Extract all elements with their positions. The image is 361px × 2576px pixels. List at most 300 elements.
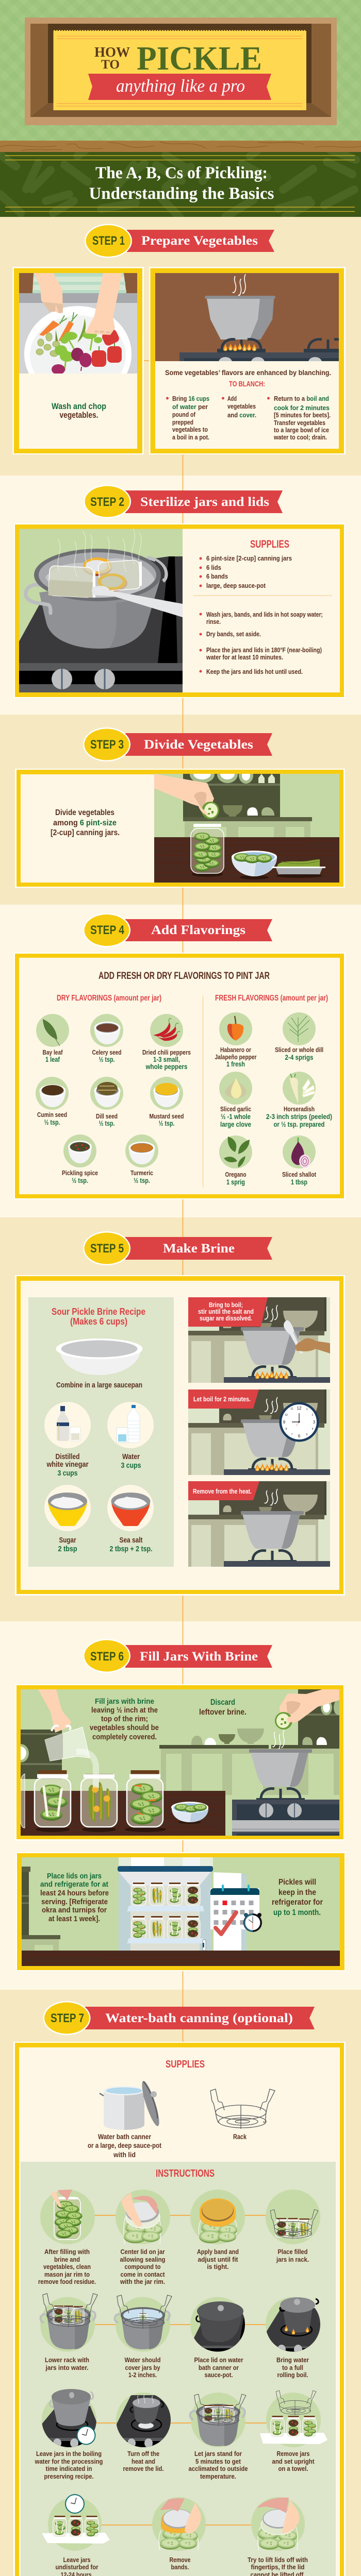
label: cumin seed: Cumin seed (37, 1111, 67, 1118)
step 1 heading (85, 224, 274, 258)
instruction icon: leave undisturbed (42, 2494, 110, 2551)
icon: clock: 3 (313, 1420, 316, 1425)
step 7 heading: STEP 7 (51, 2011, 84, 2025)
instruction icon: remove bands (152, 2497, 206, 2551)
label: clean jar rim: mason jar rim to (44, 2270, 90, 2278)
panel: refrigerate (16, 1852, 346, 1971)
label: water: Water (122, 1452, 140, 1461)
wood strip (0, 141, 361, 152)
label: vinegar: 3 cups (58, 1469, 77, 1478)
icon: dill seed (90, 1077, 123, 1110)
icon: clock: 6 (298, 1434, 301, 1438)
step 5 heading: Make Brine (163, 1242, 235, 1256)
instruction icon: center lid (116, 2190, 170, 2244)
icon: cumin seed (36, 1077, 69, 1110)
step 2 heading (84, 485, 283, 518)
label: horseradish: Horseradish (284, 1105, 315, 1113)
icon: turmeric (125, 1134, 158, 1167)
instructions list: Place the jars and lids in 180°F (near-boiling) (206, 646, 322, 654)
illustration: vegetables on plate (19, 273, 137, 374)
step 4 heading: Add Flavorings (151, 923, 245, 937)
label: habanero (215, 1046, 257, 1068)
label: dill: Sliced or whole dill (275, 1046, 323, 1054)
label: leave undisturbed (56, 2556, 98, 2576)
label: sea salt (109, 1536, 153, 1553)
icon: clock: 1 (306, 1408, 308, 1411)
label: horseradish (266, 1105, 332, 1128)
label: center lid: compound to (125, 2263, 161, 2270)
text: fill jars with brine (90, 1697, 159, 1741)
instruction icon: lower rack (40, 2294, 97, 2351)
step 3 heading: STEP 3 (90, 738, 124, 752)
label: center lid: come in contact (121, 2270, 165, 2278)
label: pickling spice: Pickling spice (62, 1169, 98, 1177)
icon: clock: 2 (312, 1414, 314, 1417)
supplies list: large, deep sauce-pot (206, 582, 266, 589)
label: apply band: is tight. (207, 2263, 229, 2270)
label: center lid: with the jar rim. (120, 2278, 165, 2285)
label: habanero: Habanero or (220, 1046, 251, 1054)
instruction icon: let jars stand (190, 2393, 246, 2447)
label: sugar (58, 1536, 77, 1553)
label: place jars in rack: jars in rack. (276, 2256, 309, 2263)
illustration: filling jar with slices (154, 766, 339, 883)
icon: clock: 12 (297, 1406, 302, 1411)
instruction icon: jars in rack (266, 2190, 320, 2244)
intro text: TO BLANCH: (229, 380, 265, 388)
step 2 heading: STEP 2 (90, 495, 124, 509)
label: mustard seed: ½ tsp. (159, 1119, 174, 1127)
icon: horseradish (283, 1072, 316, 1105)
label: water: 3 cups (121, 1461, 141, 1470)
label: water covers jars: cover jars by (125, 2364, 160, 2371)
label: sea salt: 2 tbsp + 2 tsp. (109, 1545, 153, 1553)
supplies list (193, 538, 332, 596)
label: bay leaf: 1 leaf (45, 1055, 60, 1063)
instructions list: Dry bands, set aside. (206, 630, 261, 638)
icon: clock: 9 (283, 1420, 286, 1425)
panel: add flavorings (14, 953, 346, 1199)
bullet: bring water: pound of (172, 411, 196, 418)
label: turmeric: ½ tsp. (134, 1176, 150, 1184)
step 1 heading: STEP 1 (92, 234, 125, 248)
label: dill (275, 1046, 323, 1061)
tag: bring to boil: sugar are dissolved. (200, 1314, 252, 1322)
icon: dried chili peppers (150, 1014, 183, 1047)
text: fill jars with brine: completely covered. (92, 1733, 157, 1741)
label: dill seed (96, 1112, 118, 1127)
label: canner (88, 2132, 161, 2159)
bullet: return to a boil: Transfer vegetables (274, 419, 325, 427)
icon: water (107, 1402, 154, 1448)
label: dill: 2-4 sprigs (285, 1053, 314, 1061)
label: garlic: ½ -1 whole (221, 1112, 251, 1121)
label: canner: or a large, deep sauce-pot (88, 2141, 161, 2149)
label: processing time: time indicated in (45, 2465, 92, 2472)
icon: dill (283, 1012, 316, 1045)
bullet: return to a boil: cook for 2 minutes (274, 404, 330, 412)
label: water covers jars: Water should (125, 2356, 161, 2364)
text: discard: leftover brine. (199, 1708, 247, 1717)
label: dill seed: ½ tsp. (99, 1119, 114, 1127)
label: test seal: fingertips, If the lid (251, 2563, 305, 2571)
instructions list: Wash jars, bands, and lids in hot soapy water; (206, 611, 323, 618)
supplies list: 6 bands (206, 572, 228, 580)
tag: let boil: Let boil for 2 minutes. (193, 1395, 251, 1403)
heading: flavorings: ADD FRESH OR DRY FLAVORINGS TO PINT JAR (99, 971, 270, 981)
label: remove bands: bands. (171, 2563, 189, 2571)
panel: divide vegetables (15, 766, 345, 888)
panel: sterilize jars (14, 523, 345, 698)
instructions list: water for at least 10 minutes. (206, 653, 283, 661)
label: test seal (246, 2556, 309, 2576)
label: clean jar rim: brine and (54, 2256, 80, 2263)
bullet: bring water: vegetables to (172, 426, 208, 433)
label: clean jar rim: vegetables, clean (43, 2263, 91, 2270)
label: canner: with lid (113, 2150, 136, 2159)
step 6 heading: Fill Jars With Brine (140, 1650, 258, 1664)
icon: habanero (219, 1012, 252, 1045)
illustration: let boil (188, 1389, 330, 1475)
label: water covers jars (125, 2356, 161, 2379)
label: remove bands: Remove (169, 2556, 191, 2564)
text: place lids: and refrigerate for at (40, 1880, 108, 1889)
icon: water bath canner (100, 2079, 162, 2130)
bullet: return to a boil: to a large bowl of ice (274, 426, 329, 434)
label: place jars in rack: Place filled (277, 2248, 308, 2256)
step 2 heading: Sterilize jars and lids (140, 495, 269, 509)
text: place lids (40, 1872, 109, 1923)
instruction icon: place lid on canner (190, 2297, 248, 2354)
text: combine: Combine in a large saucepan (56, 1381, 142, 1389)
label: center lid (120, 2248, 166, 2285)
label: remove jars: Remove jars (276, 2450, 309, 2458)
connectors (94, 2215, 273, 2525)
panel: fill jars (12, 1684, 344, 1840)
label: sugar: Sugar (59, 1536, 76, 1545)
caption: wash and chop: vegetables. (60, 410, 98, 420)
label: processing time (35, 2450, 103, 2480)
banner: a, b, cs of pickling: The A, B, Cs of Pickling: (95, 164, 268, 182)
bullet: add vegetables: vegetables (227, 402, 256, 410)
label: place lid: Place lid on water (194, 2356, 243, 2364)
panel: wash and chop (12, 267, 144, 454)
tag: bring to boil (188, 1297, 268, 1327)
label: celery seed (92, 1048, 122, 1063)
bullet: return to a boil: Return to a boil and (274, 395, 329, 402)
text: divide vegetables: [2-cup] canning jars. (51, 828, 120, 837)
panel: make brine (15, 1275, 345, 1596)
instruction icon: water covers jars (115, 2295, 172, 2351)
label: leave undisturbed: undisturbed for (56, 2563, 98, 2571)
text: pickles will keep: up to 1 month. (273, 1908, 321, 1917)
step 6 heading (83, 1639, 272, 1673)
illustration: remove from heat (188, 1481, 330, 1567)
label: clean jar rim: After filling with (44, 2248, 90, 2256)
step 6 heading: STEP 6 (90, 1650, 124, 1664)
label: turn off (123, 2450, 164, 2472)
step 3 heading: Divide Vegetables (144, 738, 253, 752)
label: habanero: 1 fresh (226, 1060, 245, 1068)
label: apply band: adjust until fit (198, 2256, 238, 2263)
label: place lid: sauce-pot. (204, 2371, 233, 2379)
label: sugar: 2 tbsp (58, 1545, 77, 1553)
label: turn off: Turn off the (127, 2450, 159, 2458)
text: place lids: at least 1 week]. (48, 1914, 100, 1923)
label: remove jars: and set upright (272, 2458, 315, 2465)
label: rolling boil: to a full (282, 2364, 303, 2371)
step 5 heading: STEP 5 (90, 1242, 124, 1256)
label: place jars in rack (276, 2248, 309, 2263)
label: sea salt: Sea salt (120, 1536, 142, 1545)
label: mustard seed (150, 1112, 184, 1127)
supplies list: SUPPLIES (250, 538, 289, 550)
label: remove jars (272, 2450, 315, 2472)
label: rack: Rack (233, 2132, 247, 2141)
instruction icon: test seal (251, 2497, 305, 2551)
label: celery seed: Celery seed (92, 1048, 122, 1056)
label: turn off: remove the lid. (123, 2465, 164, 2472)
bullet: bring water: of water per (172, 403, 208, 411)
label: oregano: Oregano (225, 1171, 247, 1178)
icon: rack (210, 2089, 275, 2129)
text: fill jars with brine: Fill jars with brine (95, 1697, 154, 1706)
label: leave undisturbed: Leave jars (63, 2556, 91, 2564)
label: dried chili peppers (142, 1048, 191, 1071)
label: canner: Water bath canner (98, 2132, 151, 2141)
label: center lid: Center lid on jar (121, 2248, 165, 2256)
icon: celery seed (90, 1014, 123, 1047)
connector line (144, 361, 183, 2042)
header background (0, 0, 361, 141)
caption: wash and chop (52, 401, 106, 420)
label: garlic: large clove (220, 1120, 251, 1128)
instruction icon: clean jar rim (40, 2190, 95, 2244)
intro text: Some vegetables’ flavors are enhanced by blanching. (165, 368, 331, 377)
tag: remove from heat (188, 1481, 259, 1500)
label: apply band: Apply band and (197, 2248, 239, 2256)
text: place lids: serving. [Refrigerate (41, 1897, 108, 1906)
label: place lid (194, 2356, 243, 2379)
step 4 heading: STEP 4 (90, 923, 125, 937)
label: let jars stand (189, 2450, 248, 2480)
label: turn off: heat and (132, 2458, 155, 2465)
icon: mustard seed (150, 1077, 183, 1110)
intro text (165, 368, 331, 388)
bullet: bring water: Bring 16 cups (172, 395, 209, 402)
panel: blanching (149, 267, 352, 454)
icon: large bowl (56, 1338, 142, 1375)
label: cumin seed: ½ tsp. (44, 1118, 60, 1126)
supplies list: 6 lids (206, 564, 221, 571)
title sign (25, 18, 337, 125)
icon: clock: 7 (291, 1433, 293, 1436)
bullet: bring water (166, 395, 209, 441)
icon: clock (280, 1402, 319, 1442)
recipe title: (Makes 6 cups) (70, 1316, 127, 1327)
label: let jars stand: Let jars stand for (194, 2450, 242, 2458)
text: place lids: Place lids on jars (47, 1872, 102, 1880)
label: celery seed: ½ tsp. (99, 1055, 114, 1063)
label: mustard seed: Mustard seed (150, 1112, 184, 1120)
icon: pickling spice (63, 1134, 96, 1167)
label: vinegar: white vinegar (46, 1460, 89, 1469)
title sign: PICKLE (137, 40, 262, 77)
label: habanero: Jalapeño pepper (215, 1053, 257, 1061)
title sign: TO (101, 58, 120, 72)
instruction icon: apply band (190, 2190, 245, 2244)
instruction icon: jars on towel (260, 2391, 327, 2447)
bullet: add vegetables: Add (227, 395, 237, 402)
text: divide vegetables: Divide vegetables (55, 808, 114, 817)
label: apply band (197, 2248, 239, 2270)
instructions list (199, 611, 323, 675)
label: rolling boil: Bring water (276, 2356, 309, 2364)
step 3 heading (83, 727, 272, 761)
text: fill jars with brine: leaving ½ inch at the (91, 1706, 158, 1715)
label: dried chili peppers: whole peppers (145, 1062, 188, 1071)
label: shallot: Sliced shallot (282, 1171, 317, 1178)
step 5 heading (83, 1231, 272, 1265)
label: dried chili peppers: Dried chili peppers (142, 1048, 191, 1056)
label: oregano (225, 1171, 247, 1186)
label: test seal: Try to lift lids off with (248, 2556, 308, 2564)
label: vinegar (46, 1452, 89, 1478)
label: shallot (282, 1171, 317, 1186)
bullet: add vegetables (222, 395, 256, 419)
banner: a, b, cs of pickling: Understanding the Basics (89, 184, 274, 203)
icon: clock: 11 (290, 1408, 293, 1411)
bullet: return to a boil: [5 minutes for beets]. (274, 411, 331, 419)
instructions list: Keep the jars and lids hot until used. (206, 668, 303, 675)
instruction icon: processing time (42, 2389, 96, 2447)
heading: instructions: INSTRUCTIONS (156, 2168, 215, 2179)
icon: oregano (219, 1136, 252, 1168)
label: lower rack: Lower rack with (45, 2356, 89, 2364)
label: turmeric (130, 1169, 153, 1184)
bullet: add vegetables: and cover. (227, 411, 256, 419)
text: fill jars with brine: top of the rim; (101, 1715, 148, 1723)
illustration: pot with jars (19, 529, 183, 692)
bullet: bring water: a boil in a pot. (172, 433, 209, 441)
label: processing time: preserving recipe. (44, 2472, 94, 2480)
instructions list: rinse. (206, 618, 221, 625)
bullet: return to a boil (267, 395, 331, 441)
label: center lid: allowing sealing (120, 2256, 166, 2263)
label: let jars stand: temperature. (200, 2472, 236, 2480)
illustration: bring to boil (188, 1297, 330, 1383)
text: fill jars with brine: vegetables should be (90, 1723, 159, 1732)
label: clean jar rim: remove food residue. (38, 2278, 96, 2285)
icon: sugar (44, 1485, 91, 1531)
label: lower rack (45, 2356, 89, 2371)
icon: distilled white vinegar (44, 1402, 91, 1448)
bullet: return to a boil: water to cool; drain. (273, 433, 327, 441)
icon: clock: 5 (306, 1433, 308, 1436)
text: pickles will keep: Pickles will (278, 1878, 316, 1887)
label: water (121, 1452, 141, 1470)
recipe title: Sour Pickle Brine Recipe (52, 1307, 145, 1317)
text: divide vegetables: among 6 pint-size (53, 819, 117, 827)
step 7 heading (43, 2001, 315, 2035)
illustration: pouring brine (12, 1689, 343, 1836)
tag: let boil (188, 1389, 259, 1409)
label: processing time: water for the processing (35, 2458, 103, 2465)
tag: bring to boil: stir until the salt and (198, 1308, 254, 1315)
label: dried chili peppers: 1-3 small, (153, 1055, 180, 1063)
label: place lid: bath canner or (199, 2364, 239, 2371)
text: pickles will keep: keep in the (278, 1888, 316, 1897)
icon: clock: 4 (312, 1428, 314, 1431)
tag: remove from heat: Remove from the heat. (193, 1487, 252, 1495)
panel: water-bath canning (13, 2042, 346, 2576)
icon: clock: 10 (285, 1414, 288, 1417)
column headings (57, 994, 328, 1188)
icon: bay leaf (36, 1014, 69, 1047)
tag: bring to boil: Bring to boil; (209, 1301, 243, 1309)
label: rolling boil: rolling boil. (277, 2371, 308, 2379)
illustration: pot on stove (155, 273, 339, 361)
banner: a, b, cs of pickling (0, 150, 361, 217)
step 7 heading: Water-bath canning (optional) (105, 2011, 293, 2025)
instruction icon: rolling boil (266, 2297, 320, 2351)
label: turmeric: Turmeric (130, 1169, 153, 1177)
text: place lids: okra and turnips for (42, 1906, 107, 1914)
supplies list: 6 pint-size [2-cup] canning jars (206, 554, 292, 562)
step 1 heading: Prepare Vegetables (141, 234, 258, 248)
label: let jars stand: acclimated to outside (189, 2465, 248, 2472)
instructions panel (21, 2162, 336, 2576)
label: clean jar rim (38, 2248, 96, 2285)
label: dill seed: Dill seed (96, 1112, 118, 1120)
label: lower rack: jars into water. (45, 2364, 89, 2371)
column headings: DRY FLAVORINGS (amount per jar) (57, 994, 161, 1003)
recipe title (52, 1307, 145, 1327)
icon: sea salt (107, 1485, 154, 1531)
label: remove jars: on a towel. (278, 2465, 308, 2472)
step 4 heading (83, 913, 272, 947)
icon: clock: 8 (286, 1428, 287, 1431)
text: pickles will keep (272, 1878, 323, 1917)
text: place lids: least 24 hours before (40, 1889, 109, 1897)
label: horseradish: or ½ tsp. prepared (273, 1120, 325, 1128)
label: bay leaf (42, 1048, 63, 1063)
illustration: refrigerator with jars (22, 1857, 340, 1966)
icon: garlic (219, 1072, 252, 1105)
caption: wash and chop: Wash and chop (52, 401, 106, 411)
heading: supplies: SUPPLIES (166, 2059, 205, 2070)
label: rolling boil (276, 2356, 309, 2379)
text: discard (199, 1698, 247, 1717)
label: garlic (220, 1105, 251, 1128)
bullet: bring water: prepped (172, 418, 193, 426)
label: bay leaf: Bay leaf (42, 1048, 63, 1056)
instruction icon: turn off heat (116, 2393, 171, 2447)
column headings: FRESH FLAVORINGS (amount per jar) (215, 994, 328, 1003)
recipe card (28, 1297, 174, 1567)
label: oregano: 1 sprig (226, 1178, 245, 1186)
label: cumin seed (37, 1111, 67, 1126)
text: pickles will keep: refrigerator for (272, 1898, 323, 1907)
label: pickling spice (62, 1169, 98, 1184)
title sign: anything like a pro (116, 76, 245, 96)
title sign: HOW (94, 44, 130, 60)
label: water covers jars: 1-2 inches. (128, 2371, 157, 2379)
label: let jars stand: 5 minutes to get (195, 2458, 241, 2465)
label: horseradish: 2-3 inch strips (peeled) (266, 1112, 332, 1121)
label: pickling spice: ½ tsp. (72, 1176, 88, 1184)
label: remove bands (169, 2556, 191, 2571)
